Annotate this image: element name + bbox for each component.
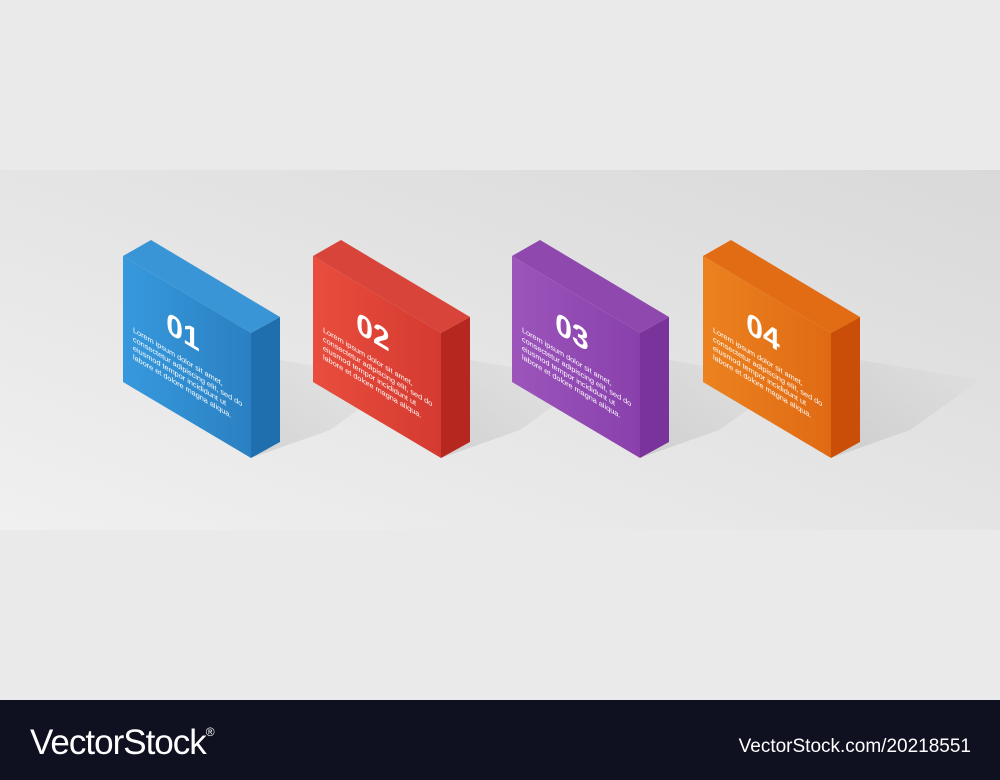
- box 04: eiusmod tempor incididunt ut: [713, 344, 807, 408]
- box 03: eiusmod tempor incididunt ut: [522, 344, 616, 408]
- box 04: labore et dolore magna aliqua.: [713, 353, 811, 420]
- box 03: Lorem ipsum dolor sit amet,: [522, 326, 612, 388]
- box 03: consectetur adipiscing elit, sed do: [522, 335, 632, 409]
- box 02: labore et dolore magna aliqua.: [323, 353, 421, 420]
- box 01: 01: [166, 305, 200, 358]
- box 04: [703, 240, 980, 458]
- box 02: 02: [356, 305, 390, 358]
- footer: [0, 700, 1000, 780]
- box 01: labore et dolore magna aliqua.: [133, 353, 231, 420]
- box 03: [512, 240, 789, 458]
- box 02: eiusmod tempor incididunt ut: [323, 344, 417, 408]
- footer: ®: [206, 725, 215, 739]
- box 01: [123, 240, 400, 458]
- footer: VectorStock.com/20218551: [739, 736, 971, 757]
- box 04: consectetur adipiscing elit, sed do: [713, 335, 823, 409]
- footer: VectorStock: [30, 723, 206, 762]
- box 02: Lorem ipsum dolor sit amet,: [323, 326, 413, 388]
- box 03: 03: [555, 305, 589, 358]
- box 04: Lorem ipsum dolor sit amet,: [713, 326, 803, 388]
- box 03: labore et dolore magna aliqua.: [522, 353, 620, 420]
- box 01: eiusmod tempor incididunt ut: [133, 344, 227, 408]
- box 02: consectetur adipiscing elit, sed do: [323, 335, 433, 409]
- box 01: consectetur adipiscing elit, sed do: [133, 335, 243, 409]
- box 01: Lorem ipsum dolor sit amet,: [133, 326, 223, 388]
- background band: [0, 170, 1000, 530]
- box 04: 04: [746, 305, 780, 358]
- box 02: [313, 240, 590, 458]
